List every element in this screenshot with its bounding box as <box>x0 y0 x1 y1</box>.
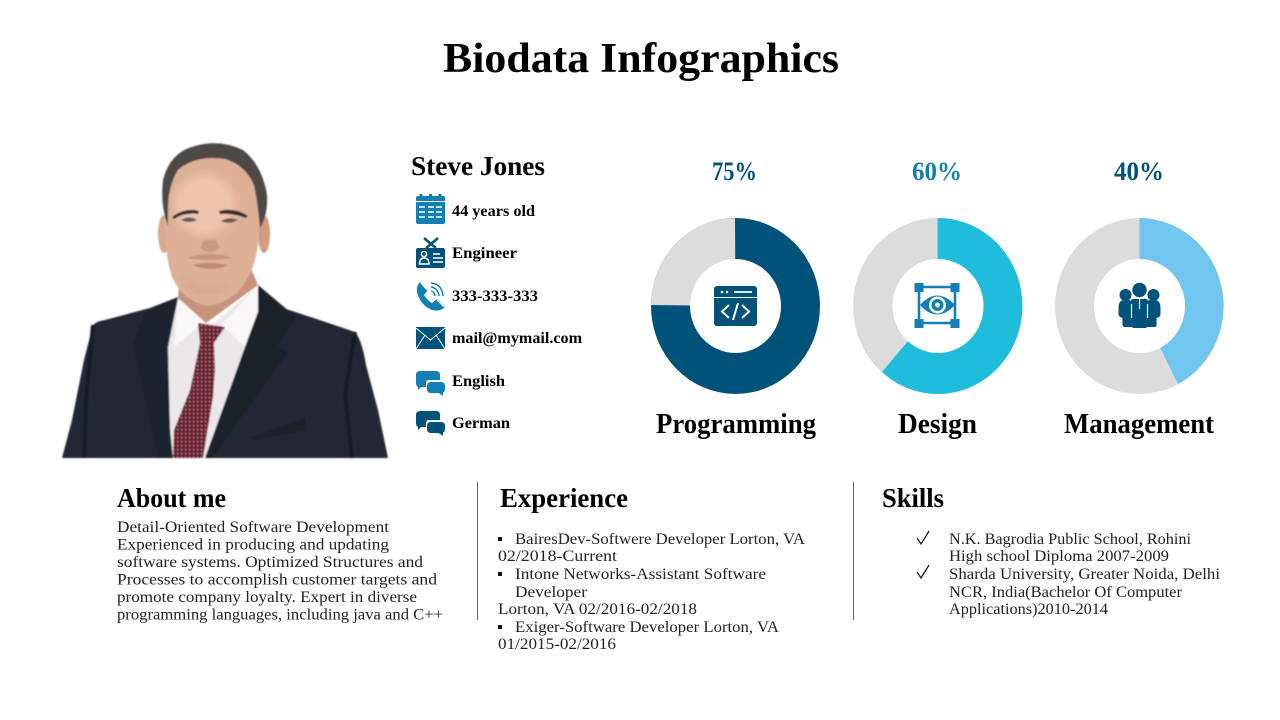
mouth <box>192 263 228 269</box>
percent: programming: 75% <box>712 157 757 186</box>
email: mail@mymail.com <box>452 330 583 347</box>
heading: skills: Skills <box>882 483 944 513</box>
about me paragraph: software systems. Optimized Structures and <box>117 554 423 571</box>
sleeve shading <box>84 325 355 458</box>
shirt <box>168 285 258 458</box>
right lapel <box>205 285 296 458</box>
icon: code window <box>714 286 757 326</box>
experience list: Intone Networks-Assistant Software <box>515 566 766 583</box>
icon: chat english <box>416 371 445 396</box>
panel: experience <box>498 483 805 653</box>
label: programming: Programming <box>656 409 816 440</box>
experience list: 01/2015-02/2016 <box>498 636 616 653</box>
about me paragraph <box>117 519 443 624</box>
about me paragraph: programming languages, including java and C++ <box>117 606 443 624</box>
tie <box>173 323 225 458</box>
title: Biodata Infographics <box>443 36 839 82</box>
heading: experience: Experience <box>500 483 628 513</box>
eyes <box>181 218 238 223</box>
donut chart: design <box>853 218 1022 394</box>
pocket <box>250 418 306 440</box>
heading: about me: About me <box>117 483 226 513</box>
about me paragraph: Experienced in producing and updating <box>117 536 389 554</box>
experience list: BairesDev-Softwere Developer Lorton, VA <box>515 531 805 548</box>
skills list: Sharda University, Greater Noida, Delhi <box>949 566 1221 583</box>
name: Steve Jones <box>411 151 545 181</box>
skills list: N.K. Bagrodia Public School, Rohini <box>949 531 1192 548</box>
phone number: 333-333-333 <box>452 288 538 305</box>
panel: about me <box>117 483 443 624</box>
experience list: Lorton, VA 02/2016-02/2018 <box>498 601 697 618</box>
about me paragraph: promote company loyalty. Expert in diverse <box>117 589 417 606</box>
portrait photo <box>62 143 388 458</box>
about me paragraph: Detail-Oriented Software Development <box>117 519 390 536</box>
about me paragraph: Processes to accomplish customer targets and <box>117 572 437 588</box>
icon: phone <box>417 282 445 311</box>
skills list <box>917 531 1221 618</box>
age: 44 years old <box>452 203 535 220</box>
experience list: Developer <box>515 584 588 601</box>
donut chart: management <box>1055 218 1224 394</box>
face <box>165 157 260 306</box>
experience list: 02/2018-Current <box>498 548 618 565</box>
moustache shadow <box>187 254 232 260</box>
percent: design: 60% <box>912 157 962 186</box>
icon: team <box>1118 283 1160 328</box>
skills list: Applications)2010-2014 <box>949 601 1108 618</box>
donut chart: programming <box>651 218 820 394</box>
icon: mail <box>416 327 445 349</box>
eyebrows <box>172 210 248 219</box>
nose shadow <box>200 240 220 252</box>
skills list: NCR, India(Bachelor Of Computer <box>949 584 1183 601</box>
label: design: Design <box>898 409 977 440</box>
neck <box>178 266 258 323</box>
icon: calendar <box>416 194 445 224</box>
icon: chat german <box>416 411 445 436</box>
icon: id badge <box>416 238 445 268</box>
percent: management: 40% <box>1114 157 1164 186</box>
face highlight <box>175 175 235 235</box>
language english: English <box>452 373 505 390</box>
icon: eye in frame <box>914 283 960 328</box>
experience list: Exiger-Software Developer Lorton, VA <box>515 619 779 636</box>
skills list: High school Diploma 2007-2009 <box>949 548 1169 565</box>
language german: German <box>452 415 510 432</box>
experience list <box>498 531 805 653</box>
ears <box>158 215 170 253</box>
jaw shading <box>178 272 246 293</box>
panel: skills <box>882 483 1221 618</box>
suit jacket <box>62 285 388 458</box>
job: Engineer <box>452 245 517 262</box>
collar <box>174 285 258 347</box>
label: management: Management <box>1064 409 1215 440</box>
left lapel <box>133 298 178 458</box>
hair <box>162 143 267 228</box>
